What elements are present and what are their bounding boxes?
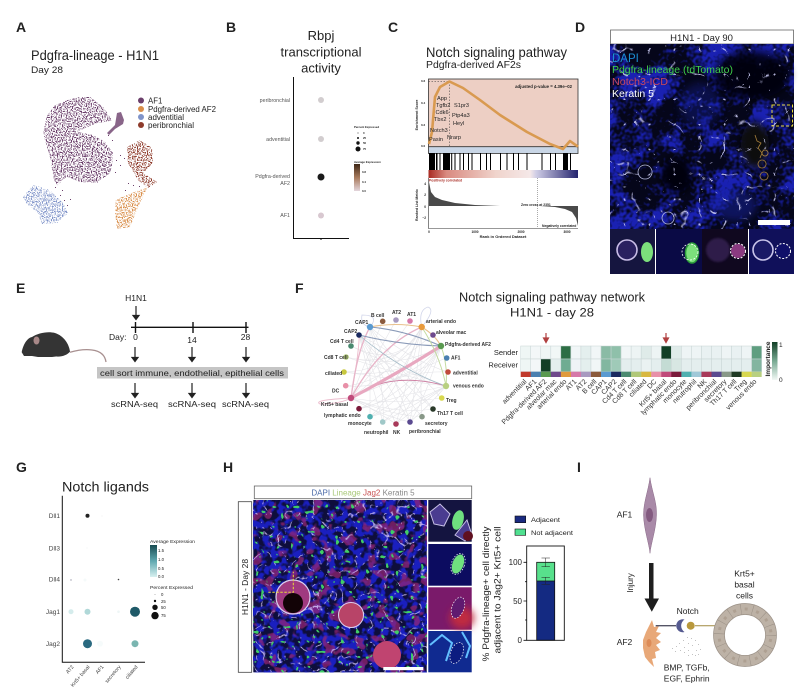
panel: A UMAP xyxy=(16,19,216,229)
heatmap column labels: CAP2 xyxy=(601,378,618,396)
legend: UMAP clusters: AF1 xyxy=(148,96,162,106)
panel: D microscopy xyxy=(575,19,794,274)
main micrograph xyxy=(253,500,427,672)
heatmap column labels: arterial endo xyxy=(536,378,568,411)
channel legend box xyxy=(254,486,472,499)
panel letter H: H xyxy=(223,459,233,475)
network node labels: arterial endo xyxy=(426,319,456,325)
grey band: cell sort: cell sort immune, endothelial, epithelial cells xyxy=(100,368,284,378)
legend: dot plot: Average Expression xyxy=(150,539,196,544)
side label box xyxy=(238,502,252,672)
network node labels: Cd8 T cell xyxy=(324,355,348,361)
bar chart: 100 xyxy=(509,558,523,567)
network node labels: AT2 xyxy=(392,310,401,316)
enrichment score plot: 0.0 xyxy=(421,144,426,148)
ranked list metric plot: 3000 xyxy=(563,230,571,234)
row labels: peribronchial xyxy=(260,98,290,104)
enrichment score plot: App xyxy=(437,96,447,102)
heatmap column labels: secretory xyxy=(703,378,729,404)
legend: UMAP clusters: peribronchial xyxy=(148,121,194,130)
network node labels: Treg xyxy=(446,398,457,404)
row labels: adventitial xyxy=(266,137,290,143)
heatmap column labels xyxy=(501,378,758,426)
ranked list metric plot: 2000 xyxy=(517,230,525,234)
row labels: Dll4 xyxy=(49,576,60,584)
label: Krt5+ basal cells: basal xyxy=(734,580,755,590)
legend: UMAP clusters xyxy=(138,96,216,130)
heatmap column labels: CAP1 xyxy=(591,378,608,396)
panel letter D: D xyxy=(575,19,585,35)
network node labels xyxy=(321,310,491,436)
bar chart: 50 xyxy=(513,597,523,606)
row labels: Dll3 xyxy=(49,546,60,552)
legend: dot plot xyxy=(150,539,196,619)
network node labels: NK xyxy=(393,430,401,436)
heatmap column labels: DC xyxy=(646,378,658,391)
arrow: Krt5+ basal marker xyxy=(664,333,668,342)
heading: Notch signaling pathway network: Notch signaling pathway network xyxy=(459,290,645,304)
enrichment score plot: Enrichment Score xyxy=(415,100,419,130)
panel letter G: G xyxy=(16,459,27,475)
enrichment score plot xyxy=(415,79,578,154)
heading: Rbpj transcriptional activity: activity xyxy=(301,60,341,76)
network nodes xyxy=(341,317,451,427)
importance legend xyxy=(765,341,783,384)
legend: dot plot: 0 xyxy=(161,592,164,597)
ranked list metric plot: Negatively correlated xyxy=(542,224,576,228)
legend: bar chart: Not adjacent xyxy=(531,530,573,537)
legend: dot plot: 0.0 xyxy=(158,574,165,579)
legend: dot plot: 0 xyxy=(363,131,365,135)
panel letter A: A xyxy=(16,19,26,35)
legend: dot plot: 0.4 xyxy=(362,180,366,184)
Notch signalling link xyxy=(656,619,715,632)
ranked list metric plot: 2 xyxy=(424,193,426,197)
chart axes xyxy=(294,77,349,240)
heatmap column labels: Pdgfra-derived AF2 xyxy=(501,378,548,426)
panel: E experimental timeline xyxy=(16,280,288,409)
gene rug xyxy=(429,153,571,170)
timeline labels: 14 xyxy=(187,335,197,345)
heatmap column labels: AT2 xyxy=(575,378,588,392)
heatmap column labels: venous endo xyxy=(725,378,758,412)
arrow: injury xyxy=(644,563,659,612)
column labels xyxy=(65,664,140,689)
heading: Rbpj transcriptional activity: transcriptional xyxy=(281,44,362,60)
rank colour bar xyxy=(428,170,578,178)
dots xyxy=(318,97,324,218)
scRNA-seq labels: scRNA-seq xyxy=(168,399,216,409)
row labels: AF2 xyxy=(280,181,290,187)
enrichment score plot: Tgfb2 xyxy=(436,103,450,109)
heading: Rbpj transcriptional activity: Rbpj xyxy=(308,28,334,43)
heatmap column labels: monocyte xyxy=(662,378,688,405)
label: ligands: EGF, Ephrin xyxy=(664,674,710,684)
UMAP scattered cells xyxy=(55,135,140,206)
ranked list metric plot xyxy=(415,178,578,239)
inset: Notch3-ICD xyxy=(702,229,748,274)
label: H1N1: H1N1 xyxy=(125,293,147,303)
column labels: AT2 xyxy=(65,664,76,675)
legend: dot plot: 25 xyxy=(363,136,367,140)
heatmap row labels: Receiver xyxy=(488,360,519,370)
network node labels: adventitial xyxy=(453,370,478,376)
inset: lineage xyxy=(428,544,472,586)
heatmap colour strip xyxy=(521,372,762,377)
enrichment score plot: 0.2 xyxy=(421,123,426,127)
column labels: AF1 xyxy=(95,664,106,676)
panel letter B: B xyxy=(226,19,236,35)
ranked list metric plot: 0 xyxy=(424,205,426,209)
legend: dot plot: 0.8 xyxy=(362,170,366,174)
arrow: AF2 marker xyxy=(544,333,548,342)
importance legend: Importance xyxy=(765,341,772,377)
scale bar xyxy=(383,667,423,670)
enrichment score plot: Pasin xyxy=(429,137,443,143)
side label box: H1N1 - Day 28 xyxy=(240,559,250,615)
inset: Jag2 xyxy=(428,587,474,630)
subheading: Pdgfra-derived AF2s: Pdgfra-derived AF2s xyxy=(426,60,521,71)
subheading: H1N1 day 28: H1N1 - day 28 xyxy=(510,306,594,320)
scRNA-seq labels xyxy=(111,399,269,409)
network node labels: secretory xyxy=(425,421,448,427)
enrichment score plot: Notch3 xyxy=(430,128,448,134)
legend: dot plot xyxy=(354,125,381,193)
inset: Keratin 5 xyxy=(428,631,472,672)
heatmap column labels: B cell xyxy=(581,378,599,396)
panel: C GSEA plot xyxy=(388,19,578,239)
network node labels: DC xyxy=(332,388,340,394)
label: ligands: BMP, TGFb, xyxy=(664,663,710,673)
heatmap column labels: Krt5+ basal xyxy=(638,378,669,409)
label: Krt5+ basal cells: cells xyxy=(736,590,753,600)
timeline labels: 28 xyxy=(241,332,250,342)
ranked list metric plot: −2 xyxy=(422,216,426,220)
bar chart: 0 xyxy=(518,636,523,645)
label: AF1: AF1 xyxy=(617,510,633,520)
bar chart xyxy=(509,546,564,645)
panel: I model schematic xyxy=(577,459,776,684)
enrichment score plot: Tbx2 xyxy=(434,117,446,123)
heatmap column labels: NK xyxy=(697,378,709,390)
chord network xyxy=(319,307,491,436)
network node labels: CAP2 xyxy=(344,329,358,335)
heatmap column labels: AF1 xyxy=(524,378,538,392)
ranked list metric plot: 4 xyxy=(424,182,426,186)
subheading: day 28: Day 28 xyxy=(31,65,63,76)
legend: dot plot: 75 xyxy=(363,147,367,151)
icon: mouse xyxy=(22,332,106,362)
legend: bar chart xyxy=(515,516,573,537)
arrows xyxy=(132,306,249,398)
heading: Notch ligands: Notch ligands xyxy=(62,480,149,494)
network node labels: Pdgfra-derived AF2 xyxy=(445,342,491,348)
inset: merged xyxy=(428,500,473,542)
channel legend: Pdgfra-lineage (tdTomato) xyxy=(612,64,733,76)
enrichment score plot: S1pr3 xyxy=(454,103,469,109)
ranked list metric plot: Positively correlated xyxy=(429,178,462,182)
row labels: Pdgfra-derived xyxy=(255,174,290,180)
network node labels: B cell xyxy=(371,313,385,319)
enrichment score plot: adjusted p-value = 4.39e−02 xyxy=(515,84,573,89)
title box: H1N1 Day 90 xyxy=(610,30,794,44)
icon: AF1 spindle cell xyxy=(644,478,657,553)
label: Krt5+ basal cells: Krt5+ xyxy=(734,569,755,579)
row labels: Jag2 xyxy=(46,641,60,648)
label: Notch: Notch xyxy=(677,606,699,616)
bar chart y-axis title xyxy=(481,526,502,662)
legend: dot plot: 0.0 xyxy=(362,189,366,193)
heatmap column labels: alveolar mac xyxy=(525,378,559,411)
inset: Keratin 5 xyxy=(749,229,794,274)
network node labels: CAP1 xyxy=(355,320,369,326)
bar chart y-axis title: adjacent to Jag2+ Krt5+ cell xyxy=(492,526,502,654)
scRNA-seq labels: scRNA-seq xyxy=(111,399,158,409)
enrichment score plot: Nrarp xyxy=(447,135,461,141)
heatmap column labels: Cd4 T cell xyxy=(601,378,629,406)
channel legend: DAPI xyxy=(612,53,639,65)
network node labels: neutrophil xyxy=(364,430,389,436)
importance legend: 0 xyxy=(779,377,783,384)
channel legend box: DAPI Lineage Jag2 Keratin 5 xyxy=(311,488,415,497)
channel legend xyxy=(612,53,733,100)
timeline labels xyxy=(109,332,250,345)
network node labels: peribronchial xyxy=(409,429,441,435)
network node labels: lymphatic endo xyxy=(324,413,361,419)
UMAP cluster: AF1 xyxy=(43,97,113,186)
row labels xyxy=(255,98,290,219)
legend: dot plot: 50 xyxy=(161,605,166,610)
heatmap column labels: AT1 xyxy=(565,378,578,392)
row labels xyxy=(46,513,60,648)
icon: secreted ligands xyxy=(672,637,701,656)
column labels: Krt5+ basal xyxy=(70,664,92,689)
heatmap column labels: ciliated xyxy=(628,378,648,399)
panel letter C: C xyxy=(388,19,398,35)
inset: merged xyxy=(610,229,655,274)
legend: dot plot: 25 xyxy=(161,599,166,604)
heading: Notch signaling pathway: Notch signaling pathway xyxy=(426,44,567,60)
panel letter I: I xyxy=(577,459,581,475)
scale bar xyxy=(758,220,790,225)
UMAP cluster: AF1 tail xyxy=(107,112,124,135)
panel: G Notch ligand dot plot xyxy=(16,459,196,689)
legend: bar chart: Adjacent xyxy=(531,517,560,524)
legend: dot plot: Percent Expressed xyxy=(354,125,379,129)
row labels: Jag1 xyxy=(46,609,60,616)
row labels: Dll1 xyxy=(49,513,60,520)
enrichment score plot: Ptp4a3 xyxy=(452,113,470,119)
panel letter E: E xyxy=(16,280,25,296)
ranked list metric plot: 0 xyxy=(428,230,430,234)
network node labels: AF1 xyxy=(451,356,461,362)
legend: dot plot: Percent Expressed xyxy=(150,585,194,590)
heatmap column labels: adventitial xyxy=(501,378,529,406)
legend: dot plot: 0.5 xyxy=(158,566,165,571)
network node labels: alveolar mac xyxy=(436,330,467,336)
network node labels: Cd4 T cell xyxy=(330,339,354,345)
column labels: secretory xyxy=(104,664,123,685)
legend: dot plot: 1.5 xyxy=(158,548,165,553)
network node labels: AT1 xyxy=(407,312,416,318)
network node labels: monocyte xyxy=(348,421,372,427)
heatmap column labels: Cd8 T cell xyxy=(611,378,639,406)
row labels: AF1 xyxy=(280,213,290,219)
ranked list metric plot: Rank in Ordered Dataset xyxy=(480,234,527,239)
ranked list metric plot: Zero cross at 2351 xyxy=(521,203,551,207)
inset: lineage xyxy=(656,229,702,274)
channel legend: Keratin 5 xyxy=(612,88,654,100)
heatmap row labels xyxy=(488,348,519,370)
panel: H Jag2 microscopy xyxy=(223,459,573,672)
legend: dot plot: 1.0 xyxy=(158,557,165,562)
scRNA-seq labels: scRNA-seq xyxy=(222,399,269,409)
timeline xyxy=(131,322,248,333)
UMAP cluster: adventitial xyxy=(23,185,68,224)
timeline labels: Day: xyxy=(109,332,126,342)
heatmap column labels: lymphatic endo xyxy=(640,378,678,417)
icon: Krt5+ basal cell ring xyxy=(714,604,776,666)
legend: dot plot: Average Expression xyxy=(354,160,381,164)
enrichment score plot: Cdk6 xyxy=(436,110,449,116)
panel: F network and heatmap xyxy=(295,280,783,436)
heatmap column labels: peribronchial xyxy=(685,378,719,412)
ligand dots xyxy=(68,514,140,648)
importance legend: 1 xyxy=(779,342,783,349)
main micrograph xyxy=(610,44,794,229)
chart axes xyxy=(62,496,145,662)
ranked list metric plot: Ranked List Metric xyxy=(415,189,419,221)
legend: UMAP clusters: adventitial xyxy=(148,113,184,122)
network node labels: Th17 T cell xyxy=(437,411,463,417)
legend: dot plot: 50 xyxy=(363,141,367,145)
enrichment score plot: Heyl xyxy=(453,121,464,127)
heatmap column labels: neutrophil xyxy=(672,378,699,405)
enrichment score plot: 0.6 xyxy=(421,79,426,83)
heatmap column labels: Treg xyxy=(733,378,748,393)
heatmap row labels: Sender xyxy=(494,348,518,357)
callout box xyxy=(772,105,792,126)
thick edge: Krt5+ basal to Pdgfra-derived AF2 xyxy=(351,346,441,398)
enrichment score plot: 0.4 xyxy=(421,101,426,105)
ranked list metric plot: 1000 xyxy=(471,230,479,234)
legend: dot plot: 75 xyxy=(161,613,166,618)
network node labels: ciliated xyxy=(325,371,342,377)
panel: B dot plot xyxy=(226,19,381,240)
label: AF2: AF2 xyxy=(617,637,633,647)
UMAP cluster: peribronchial xyxy=(127,140,157,188)
network node labels: Krt5+ basal xyxy=(321,402,349,408)
timeline labels: 0 xyxy=(133,332,138,342)
column labels: ciliated xyxy=(125,664,140,681)
icon: AF2 cell xyxy=(643,620,661,667)
UMAP cluster: Pdgfra-derived AF2 xyxy=(115,188,147,229)
panel letter F: F xyxy=(295,280,304,296)
title box: H1N1 Day 90: H1N1 - Day 90 xyxy=(670,33,733,44)
legend: UMAP clusters: Pdgfra-derived AF2 xyxy=(148,105,216,114)
network node labels: venous endo xyxy=(453,384,484,390)
bar chart y-axis title: % Pdgfra-lineage+ cell directly xyxy=(481,526,491,662)
channel legend: Notch3-ICD xyxy=(612,76,668,88)
heading: Pdgfra-lineage: Pdgfra-lineage - H1N1 xyxy=(31,48,159,63)
label: injury: Injury xyxy=(626,573,635,593)
heatmap column labels: Th17 T cell xyxy=(709,378,739,408)
heatmap xyxy=(521,346,762,372)
